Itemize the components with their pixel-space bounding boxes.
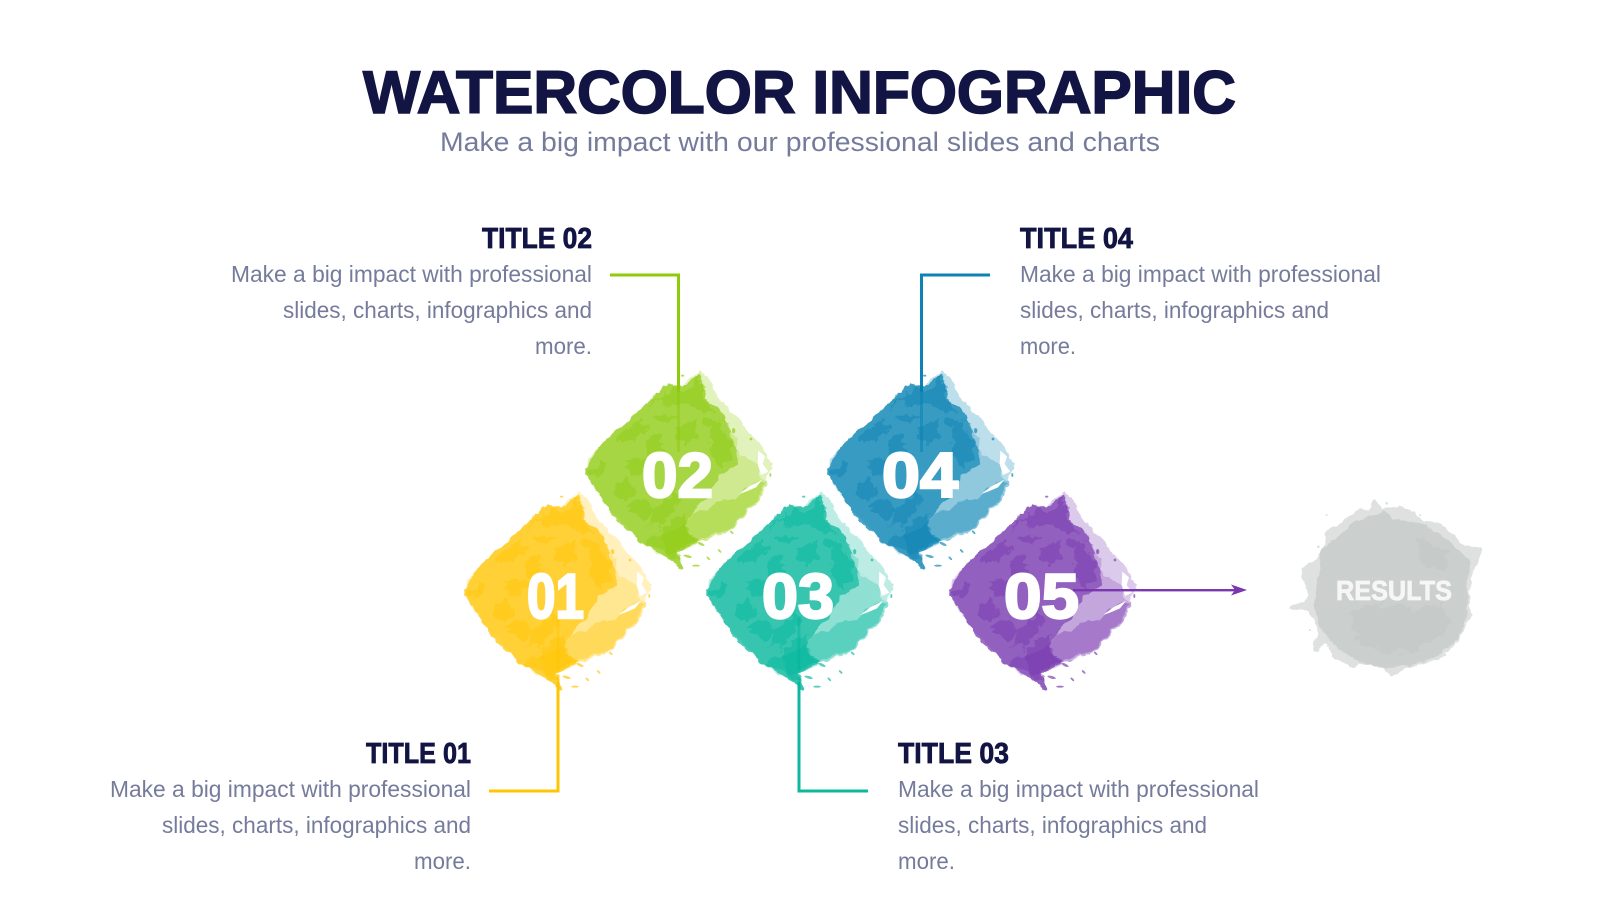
connector: title 04 <box>922 275 990 452</box>
body: title 02: more. <box>535 333 592 359</box>
body: title 02: slides, charts, infographics and <box>283 297 592 323</box>
results watercolor blob <box>1293 502 1481 675</box>
results label: RESULTS <box>1336 575 1452 606</box>
number 03: 03 <box>762 562 834 632</box>
body: title 02: Make a big impact with professional <box>231 261 592 287</box>
number 04: 04 <box>882 441 958 511</box>
step 02 watercolor diamond <box>586 372 771 567</box>
step 05 watercolor diamond <box>950 493 1135 688</box>
body: title 04: Make a big impact with professional <box>1020 261 1381 287</box>
step 01 watercolor diamond <box>465 493 650 688</box>
body: title 03: slides, charts, infographics and <box>898 812 1207 838</box>
body: title 01: more. <box>414 848 471 874</box>
text block: title 01 <box>110 738 471 874</box>
text block: title 02 <box>231 223 592 359</box>
step 03 watercolor diamond <box>707 493 892 688</box>
body: title 02 <box>231 261 592 359</box>
number 02: 02 <box>642 441 713 511</box>
heading: title 04: TITLE 04 <box>1020 223 1133 255</box>
body: title 03 <box>898 776 1259 874</box>
heading: title 03: TITLE 03 <box>898 738 1009 770</box>
body: title 04: more. <box>1020 333 1076 359</box>
connector: title 03 <box>799 618 868 791</box>
body: title 04 <box>1020 261 1381 359</box>
body: title 04: slides, charts, infographics and <box>1020 297 1329 323</box>
body: title 03: Make a big impact with professional <box>898 776 1259 802</box>
body: title 01: Make a big impact with professional <box>110 776 471 802</box>
title: WATERCOLOR INFOGRAPHIC <box>363 59 1236 126</box>
subtitle: Make a big impact with our professional slides and charts <box>440 127 1160 157</box>
body: title 03: more. <box>898 848 955 874</box>
step 04 watercolor diamond <box>828 372 1013 567</box>
connector: title 02 <box>610 275 678 452</box>
heading: title 01: TITLE 01 <box>366 738 471 770</box>
arrow to results <box>1073 584 1247 596</box>
body: title 01: slides, charts, infographics and <box>162 812 471 838</box>
number 01: 01 <box>527 562 584 632</box>
heading: title 02: TITLE 02 <box>482 223 592 255</box>
body: title 01 <box>110 776 471 874</box>
connector: title 01 <box>489 618 558 791</box>
number 05: 05 <box>1004 562 1079 632</box>
text block: title 03 <box>898 738 1259 874</box>
text block: title 04 <box>1020 223 1381 359</box>
